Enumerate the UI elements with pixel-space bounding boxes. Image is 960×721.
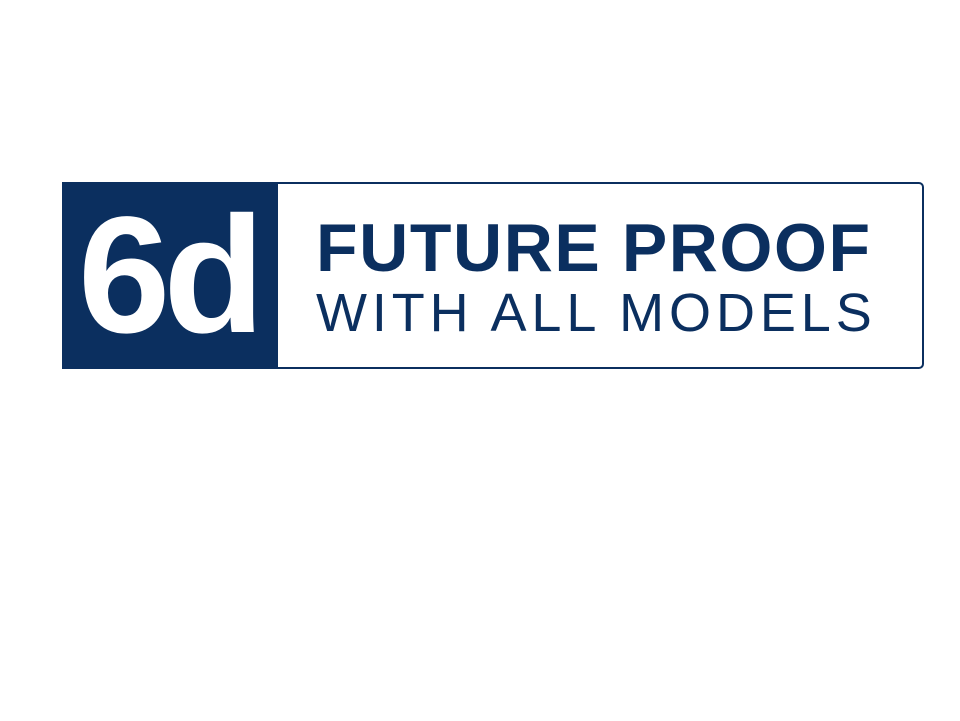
- heading: future proof: FUTURE PROOF: [316, 210, 872, 286]
- subheading: with all models: WITH ALL MODELS: [316, 283, 877, 343]
- logo text: 6d: 6d: [78, 183, 258, 368]
- panel: 6d square: [64, 184, 278, 367]
- logo badge: [62, 182, 924, 369]
